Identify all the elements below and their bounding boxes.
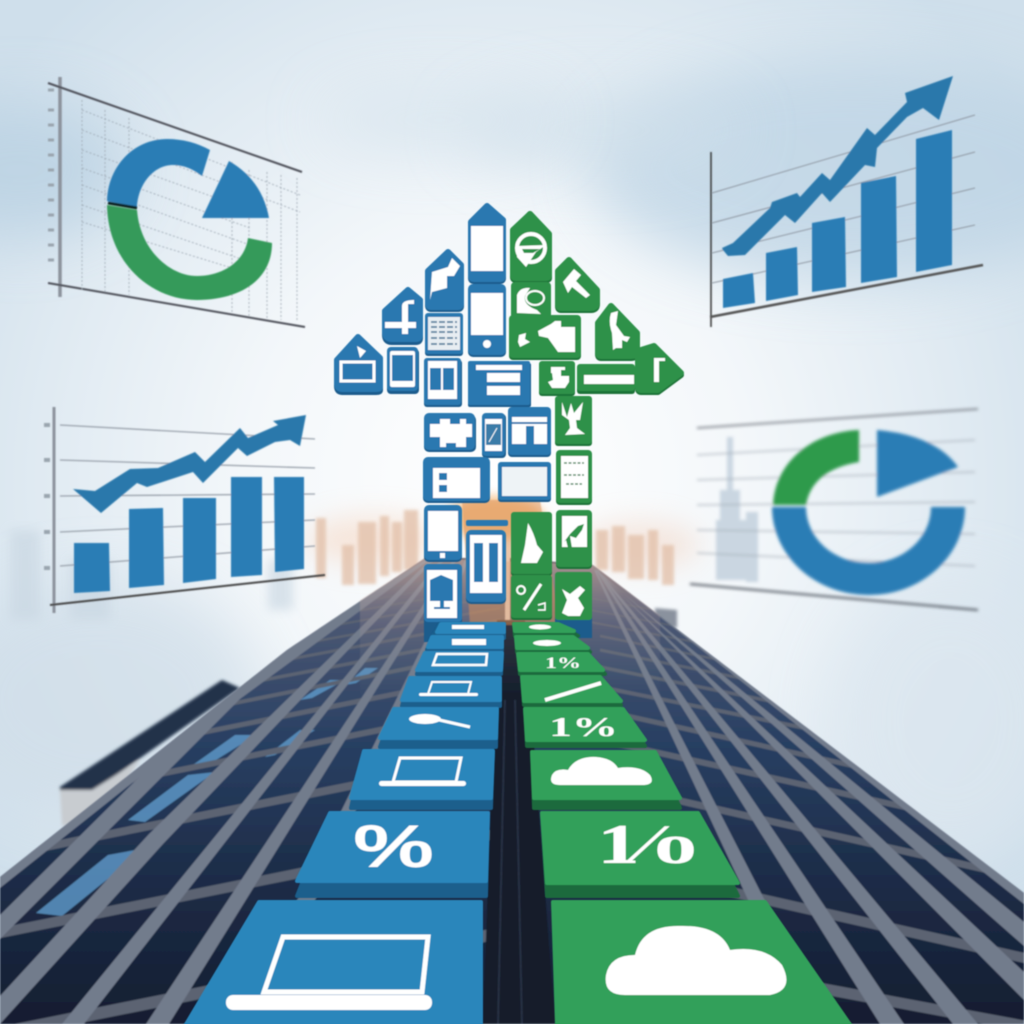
blue tile row 3: [417, 653, 502, 674]
rising arrow: [722, 76, 953, 256]
blue tile row 8: [185, 902, 481, 1024]
blue tile: small phone: [482, 413, 506, 458]
green tile row 7: 1⁄o: [597, 814, 697, 876]
right facade: [510, 555, 1024, 1024]
blue tile row 7: %: [353, 813, 434, 880]
left glass panes: [36, 668, 378, 916]
centre gutter: [483, 620, 555, 1024]
blue tile: cross: [424, 413, 476, 452]
green tile row 8: [553, 902, 851, 1024]
blue tile row 6: [351, 751, 493, 808]
green tile: small icon: [539, 361, 575, 396]
mid-left chart axes: [44, 407, 325, 613]
blue tile row 1: [432, 624, 504, 638]
blue tile: hand shape: [428, 252, 461, 309]
blue tile: two panes: [424, 358, 462, 407]
blue tile: wide screen: [423, 457, 490, 503]
green tile row 3: 1%: [545, 655, 581, 672]
blue tile: phone lower: [468, 284, 506, 357]
arrow made of app tiles: [337, 206, 681, 642]
top-left chart axes: [48, 77, 305, 327]
green tile: t symbol: [638, 346, 681, 392]
top haze: [360, 558, 660, 700]
green tile: cactus: [555, 396, 592, 446]
green tile row 6: [532, 752, 680, 808]
blue tile: monitor: [424, 564, 462, 642]
green path tiles: [514, 624, 851, 1024]
rising arrow: [73, 415, 306, 513]
green tile row 5: 1%: [549, 712, 618, 742]
green tile row 1: [514, 624, 578, 636]
faded tower behind chart: [716, 437, 758, 582]
blue tile: tablet: [387, 347, 419, 394]
green tile: figure: [598, 306, 637, 358]
chart: top-right bars and arrow: [710, 76, 983, 327]
blue tile: list: [468, 361, 531, 407]
blue ring segment: [107, 139, 210, 207]
green tile: sprout: [555, 572, 592, 638]
blue tile: window: [508, 407, 551, 457]
green tile: iron: [511, 512, 552, 576]
distant city skyline: [10, 510, 700, 620]
blue path tiles: [185, 624, 504, 1024]
green tile: leaf note: [556, 510, 592, 569]
green tile row 2: [516, 637, 590, 652]
chart: mid-left bars and arrow: [44, 407, 325, 613]
mid-right chart lines: [690, 409, 978, 610]
pie wedge: [202, 161, 269, 218]
rear building blocks: [60, 608, 677, 826]
green tile: face: [513, 214, 549, 280]
blue tile: TV: [337, 337, 380, 392]
blue tile: blank tablet: [498, 462, 551, 502]
blue bar: [466, 520, 508, 526]
blue tile: table: [425, 313, 463, 356]
ring junction: [108, 203, 137, 208]
top-right chart axes: [710, 115, 983, 327]
green tile: hammer: [558, 260, 597, 310]
blue tile row 4: [402, 678, 500, 706]
green tile row 5: [525, 709, 645, 746]
green tile: document: [556, 450, 592, 505]
skyscraper facade: [0, 500, 1024, 1024]
chart: top-left donut: [48, 77, 305, 327]
blue tile row 7: [297, 813, 488, 896]
blue tile: phone top: [471, 206, 503, 281]
blue tile: tablet button: [424, 505, 462, 562]
green tile row 4: [522, 677, 621, 705]
blue tile: tablet two bars: [466, 530, 506, 604]
chart: mid-right donut: [690, 409, 978, 610]
blue tile row 2: [427, 637, 502, 650]
blue tile: plus: [385, 290, 420, 342]
left facade: [0, 555, 510, 1024]
green ring segment: [107, 205, 272, 300]
blue tile row 5: [380, 709, 497, 747]
green tile: percent slash: [511, 575, 552, 620]
green tile row 7: [542, 813, 738, 896]
glow at horizon: [445, 496, 545, 540]
green tile row 3: [518, 654, 605, 674]
green tile: chat blob: [511, 282, 551, 323]
green tile: wide map: [509, 315, 581, 360]
green tile: bar: [577, 364, 635, 394]
